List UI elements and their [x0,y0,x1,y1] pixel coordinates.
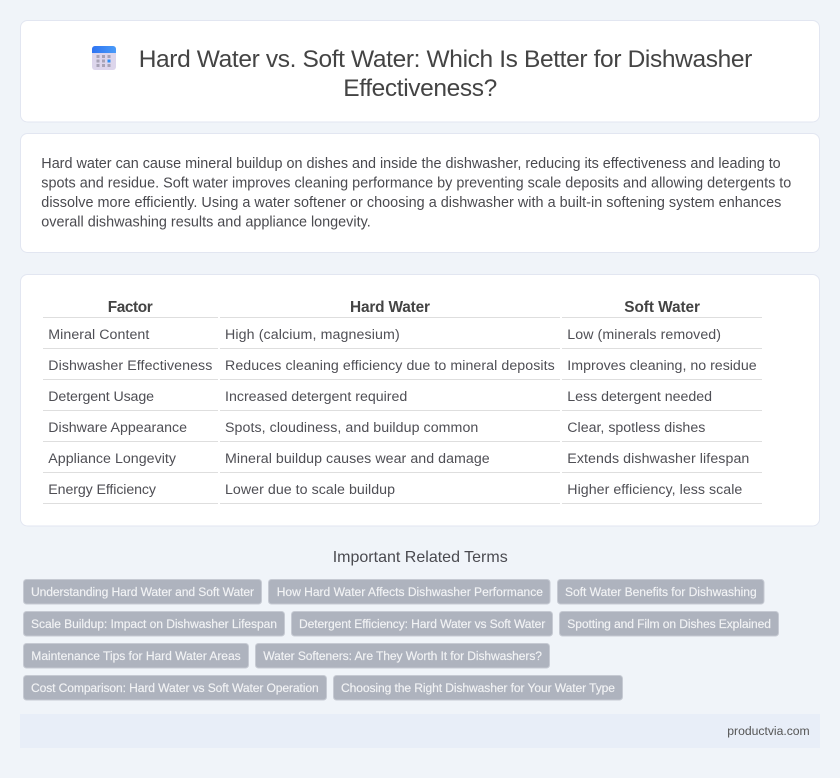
table row: energy efficiency: Higher efficiency, less scale [567,482,742,498]
table row: mineral content: Mineral Content [48,327,149,343]
chip: spotting and film [560,612,778,636]
chip: cost comparison [24,676,326,700]
text block: summary: overall dishwashing results and appliance longevity. [41,214,371,230]
panel: title header [20,20,820,122]
heading: important related terms: Important Related Terms [333,549,508,566]
table row: dishware appearance: Clear, spotless dishes [567,420,705,436]
table row: detergent usage [43,389,762,411]
table row: appliance longevity: Extends dishwasher lifespan [567,451,749,467]
icon: calendar grid [92,46,116,70]
panel: comparison table [20,274,820,526]
table row: dishwasher effectiveness [43,358,762,380]
table header row: Hard Water [350,299,430,316]
table row: mineral content: Low (minerals removed) [567,327,721,343]
table row: appliance longevity [43,451,762,473]
text block: summary [41,156,791,230]
chip: dishwasher performance: How Hard Water Affects Dishwasher Performance [277,585,543,599]
chip: soft water benefits: Soft Water Benefits for Dishwashing [565,585,757,599]
chip: dishwasher performance [268,580,550,604]
chip: water softeners [256,644,550,668]
chip: understanding hard and soft water: Understanding Hard Water and Soft Water [31,585,254,599]
table row: appliance longevity: Appliance Longevity [48,451,177,467]
chip: water softeners: Water Softeners: Are They Worth It for Dishwashers? [263,649,542,663]
table row: dishwasher effectiveness: Improves cleaning, no residue [567,358,757,374]
chip: cost comparison: Cost Comparison: Hard Water vs Soft Water Operation [31,681,319,695]
related terms chips [24,580,778,700]
table row: dishware appearance [43,420,762,442]
table row: dishwasher effectiveness: Reduces cleaning efficiency due to mineral deposits [225,358,555,374]
chip: detergent efficiency: Detergent Efficiency: Hard Water vs Soft Water [299,617,545,631]
footer bar [20,714,820,748]
table row: appliance longevity: Mineral buildup causes wear and damage [225,451,490,467]
table header row: Soft Water [624,299,700,316]
chip: choosing the right dishwasher [334,676,622,700]
text block: summary: dissolve more efficiently. Using a water softener or choosing a dishwasher with a built-in softening system enhances [41,195,781,211]
table row: dishwasher effectiveness: Dishwasher Effectiveness [48,358,212,374]
title [139,46,752,102]
title: Effectiveness? [343,75,497,102]
chip: scale buildup [24,612,284,636]
table row: detergent usage: Less detergent needed [567,389,712,405]
chip: soft water benefits [558,580,764,604]
table row: mineral content: High (calcium, magnesium) [225,327,400,343]
table header row [43,299,762,318]
chip: maintenance tips [24,644,248,668]
chip: spotting and film: Spotting and Film on Dishes Explained [567,617,771,631]
table row: dishware appearance: Spots, cloudiness, and buildup common [225,420,478,436]
table row: detergent usage: Increased detergent required [225,389,407,405]
title: Hard Water vs. Soft Water: Which Is Better for Dishwasher [139,46,752,73]
table row: detergent usage: Detergent Usage [48,389,154,405]
chip: maintenance tips: Maintenance Tips for Hard Water Areas [31,649,241,663]
footer source text: productvia.com [727,724,810,738]
table row: energy efficiency: Energy Efficiency [48,482,157,498]
table row: energy efficiency [43,482,762,504]
text block: summary: spots and residue. Soft water improves cleaning performance by preventing scale deposits and allowing detergents to [41,176,791,192]
chip: understanding hard and soft water [24,580,262,604]
table row: mineral content [43,327,762,349]
table row: energy efficiency: Lower due to scale buildup [225,482,395,498]
panel: summary paragraph [20,134,820,252]
chip: choosing the right dishwasher: Choosing the Right Dishwasher for Your Water Type [341,681,615,695]
text block: summary: Hard water can cause mineral buildup on dishes and inside the dishwasher, reducing its effectiveness and leading to [41,156,781,172]
chip: detergent efficiency [292,612,552,636]
chip: scale buildup: Scale Buildup: Impact on Dishwasher Lifespan [31,617,277,631]
table row: dishware appearance: Dishware Appearance [48,420,187,436]
table header row: Factor [108,299,153,316]
